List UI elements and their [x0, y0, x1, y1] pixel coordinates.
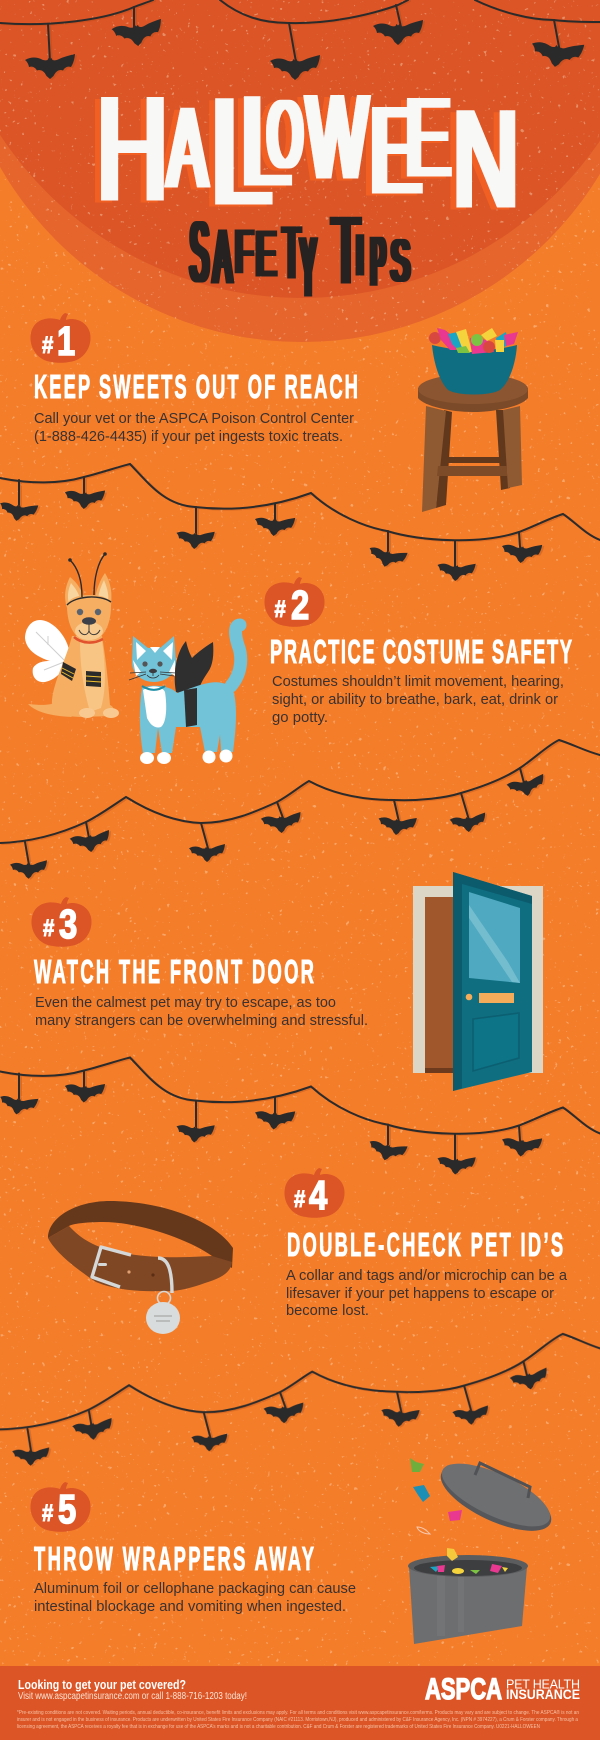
title: Halloween: O	[268, 80, 302, 188]
title: Halloween: L	[210, 67, 272, 237]
badge: pumpkin #5	[30, 1482, 91, 1532]
footer	[0, 1666, 600, 1740]
title: Safety Tips: I	[356, 222, 364, 288]
title: Safety Tips: F	[235, 218, 253, 287]
body: tip 4	[286, 1268, 568, 1319]
body: tip 4: become lost.	[286, 1303, 369, 1319]
badge: pumpkin #2: #	[274, 595, 286, 622]
badge: pumpkin #3	[31, 897, 92, 947]
title: Safety Tips: S	[190, 206, 209, 300]
logo: ASPCA Pet Health Insurance	[425, 1673, 580, 1706]
logo: ASPCA Pet Health Insurance: ASPCA	[425, 1673, 502, 1706]
illustration: collar with tag	[48, 1201, 233, 1334]
badge: pumpkin #4	[284, 1168, 345, 1218]
badge: pumpkin #2: 2	[291, 581, 309, 628]
badge: pumpkin #3: #	[43, 914, 55, 941]
footer call to action: Visit www.aspcapetinsurance.com or call 1-888-716-1203 today!	[18, 1691, 247, 1702]
fine print	[17, 1709, 579, 1730]
body: tip 3	[35, 995, 368, 1029]
title: Safety Tips: A	[214, 215, 232, 300]
illustration: dog in bee costume	[25, 552, 119, 718]
title: Safety Tips: P	[371, 222, 385, 300]
illustration: open front door	[413, 872, 543, 1091]
string of bats: row 1	[0, 464, 600, 583]
badge: pumpkin #3: 3	[59, 900, 77, 947]
icon: stool with candy bowl	[418, 328, 528, 512]
badge: pumpkin #4: 4	[309, 1171, 328, 1218]
badge: pumpkin #4: #	[294, 1185, 306, 1212]
body: tip 3: many strangers can be overwhelming and stressful.	[35, 1013, 368, 1029]
body: tip 1: Call your vet or the ASPCA Poison Control Center	[34, 411, 354, 427]
string of bats: row 2	[0, 740, 600, 879]
body: tip 2: sight, or ability to breathe, bark, eat, drink or	[272, 692, 558, 708]
title: Halloween: E	[370, 82, 422, 220]
heading: tip 3: WATCH THE FRONT DOOR	[34, 953, 314, 990]
heading: tip 5: THROW WRAPPERS AWAY	[34, 1540, 314, 1577]
string of bats: row 4	[0, 1326, 600, 1473]
badge: pumpkin #1	[30, 313, 91, 364]
body: tip 5: Aluminum foil or cellophane packaging can cause	[34, 1581, 356, 1597]
title: Halloween	[97, 65, 519, 238]
title: Safety Tips: T	[332, 198, 360, 305]
title: Halloween: H	[97, 65, 168, 232]
badge: pumpkin #5: 5	[58, 1485, 76, 1532]
badge: pumpkin #5: #	[42, 1499, 54, 1526]
logo: ASPCA Pet Health Insurance: INSURANCE	[506, 1687, 580, 1702]
footer call to action: Looking to get your pet covered?	[18, 1678, 186, 1692]
body: tip 1: (1-888-426-4435) if your pet ingests toxic treats.	[34, 429, 343, 445]
title: Safety Tips: E	[256, 217, 276, 290]
title: Halloween: E	[405, 74, 451, 200]
body: tip 3: Even the calmest pet may try to escape, as too	[35, 995, 336, 1011]
body: tip 4: lifesaver if your pet happens to escape or	[286, 1286, 554, 1302]
body: tip 1	[34, 411, 354, 445]
body: tip 2	[272, 674, 564, 726]
illustration: trash can with wrappers	[408, 1451, 560, 1644]
badge: pumpkin #1: 1	[57, 317, 75, 364]
title: Safety Tips	[190, 198, 410, 315]
title: Safety Tips: S	[391, 227, 410, 294]
falling wrappers	[410, 1458, 462, 1561]
title: Halloween: L	[240, 69, 291, 213]
body: tip 5: intestinal blockage and vomiting when ingested.	[34, 1599, 346, 1615]
string of bats: top	[0, 0, 600, 80]
title: Halloween: N	[453, 81, 519, 238]
heading: tip 2: PRACTICE COSTUME SAFETY	[270, 633, 572, 670]
title: Halloween: W	[307, 71, 368, 204]
body: tip 5	[34, 1581, 356, 1615]
body: tip 4: A collar and tags and/or microchip can be a	[286, 1268, 568, 1284]
body: tip 2: go potty.	[272, 710, 328, 726]
illustration: cat in bat costume	[129, 625, 241, 764]
body: tip 2: Costumes shouldn’t limit movement, hearing,	[272, 674, 564, 690]
title: Safety Tips: T	[283, 211, 300, 294]
logo: ASPCA Pet Health Insurance: PET HEALTH	[506, 1678, 580, 1692]
badge: pumpkin #2	[264, 577, 325, 628]
title: Safety Tips: Y	[300, 221, 316, 315]
badge: pumpkin #1: #	[42, 331, 54, 358]
candies	[429, 328, 518, 354]
heading: tip 4: DOUBLE-CHECK PET ID’S	[287, 1226, 563, 1263]
heading: tip 1: KEEP SWEETS OUT OF REACH	[34, 368, 358, 405]
footer call to action	[18, 1678, 247, 1702]
string of bats: row 3	[0, 1058, 600, 1176]
title: Halloween: A	[168, 85, 207, 212]
trash can lid	[432, 1451, 560, 1544]
